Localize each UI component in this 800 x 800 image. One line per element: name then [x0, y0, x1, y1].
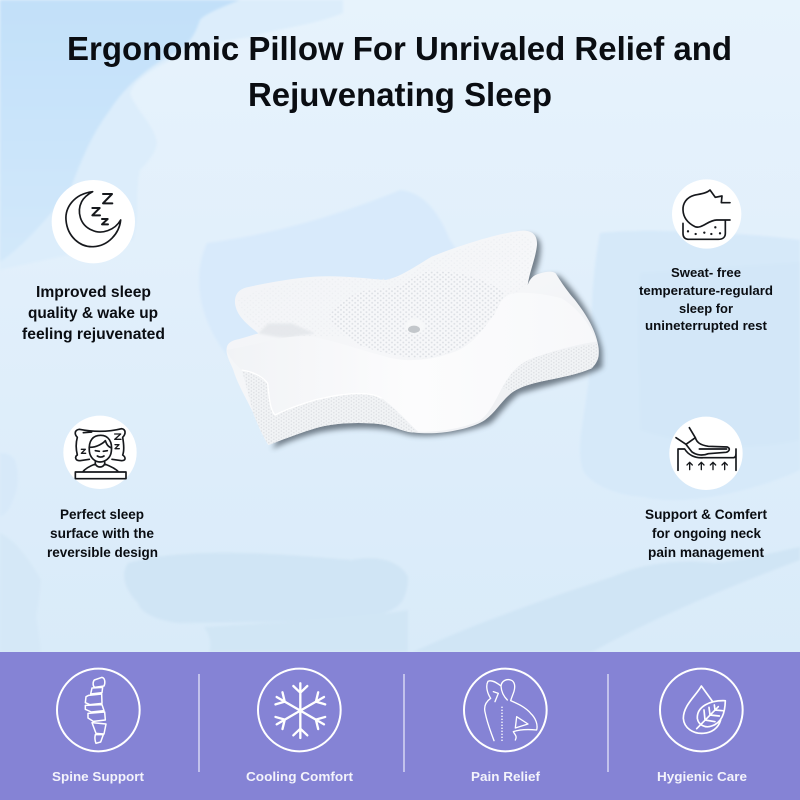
text: sweat-free: sleep for	[679, 301, 733, 316]
text: improved sleep	[22, 284, 165, 343]
centre mesh panel	[328, 271, 505, 358]
text: sweat-free: temperature-regulard	[639, 283, 773, 298]
front body surface	[227, 293, 597, 432]
text: perfect sleep surface: reversible design	[47, 545, 158, 560]
label: hygienic care: Hygienic Care	[657, 769, 747, 784]
label: pain relief: Pain Relief	[471, 769, 541, 784]
title	[67, 31, 732, 114]
back lobe knit texture	[238, 233, 534, 337]
icon: spine	[57, 669, 140, 751]
text: sweat-free	[639, 265, 773, 333]
bottom benefits band	[0, 652, 800, 800]
text: improved sleep: quality & wake up	[28, 305, 158, 322]
text: perfect sleep surface: Perfect sleep	[60, 507, 144, 522]
label: cooling comfort: Cooling Comfort	[246, 769, 354, 784]
icon: moon and zzz	[52, 180, 135, 263]
text: improved sleep: Improved sleep	[36, 284, 151, 301]
icon: head on foam pillow	[672, 179, 741, 249]
pillow cast shadow	[272, 235, 602, 449]
text: sweat-free: unineterrupted rest	[645, 318, 768, 333]
title: Ergonomic Pillow For Unrivaled Relief and	[67, 31, 732, 68]
text: perfect sleep surface: surface with the	[50, 526, 154, 541]
icon: back pain figure	[464, 669, 547, 751]
icon: person sleeping on pillow	[63, 416, 137, 489]
title: Rejuvenating Sleep	[248, 77, 552, 114]
text: support and comfort: for ongoing neck	[652, 526, 761, 541]
label: spine support: Spine Support	[52, 769, 145, 784]
text: support and comfort: pain management	[648, 545, 764, 560]
front ridge highlight	[242, 370, 382, 415]
left side mesh band	[242, 370, 417, 445]
pillow product illustration	[227, 231, 602, 449]
icon: foot pressing on supportive foam	[669, 417, 743, 490]
text: support and comfort: Support & Comfert	[645, 507, 767, 522]
text: support and comfort	[645, 507, 767, 560]
back lobe crease shading	[258, 323, 315, 338]
text: improved sleep: feeling rejuvenated	[22, 326, 165, 343]
right side mesh band	[502, 344, 598, 392]
icon: droplet and leaf	[660, 669, 743, 751]
icon: snowflake	[258, 669, 341, 751]
pillow body	[227, 231, 599, 445]
centre dimple	[405, 318, 425, 334]
text: perfect sleep surface	[47, 507, 158, 560]
text: sweat-free: Sweat- free	[671, 265, 741, 280]
